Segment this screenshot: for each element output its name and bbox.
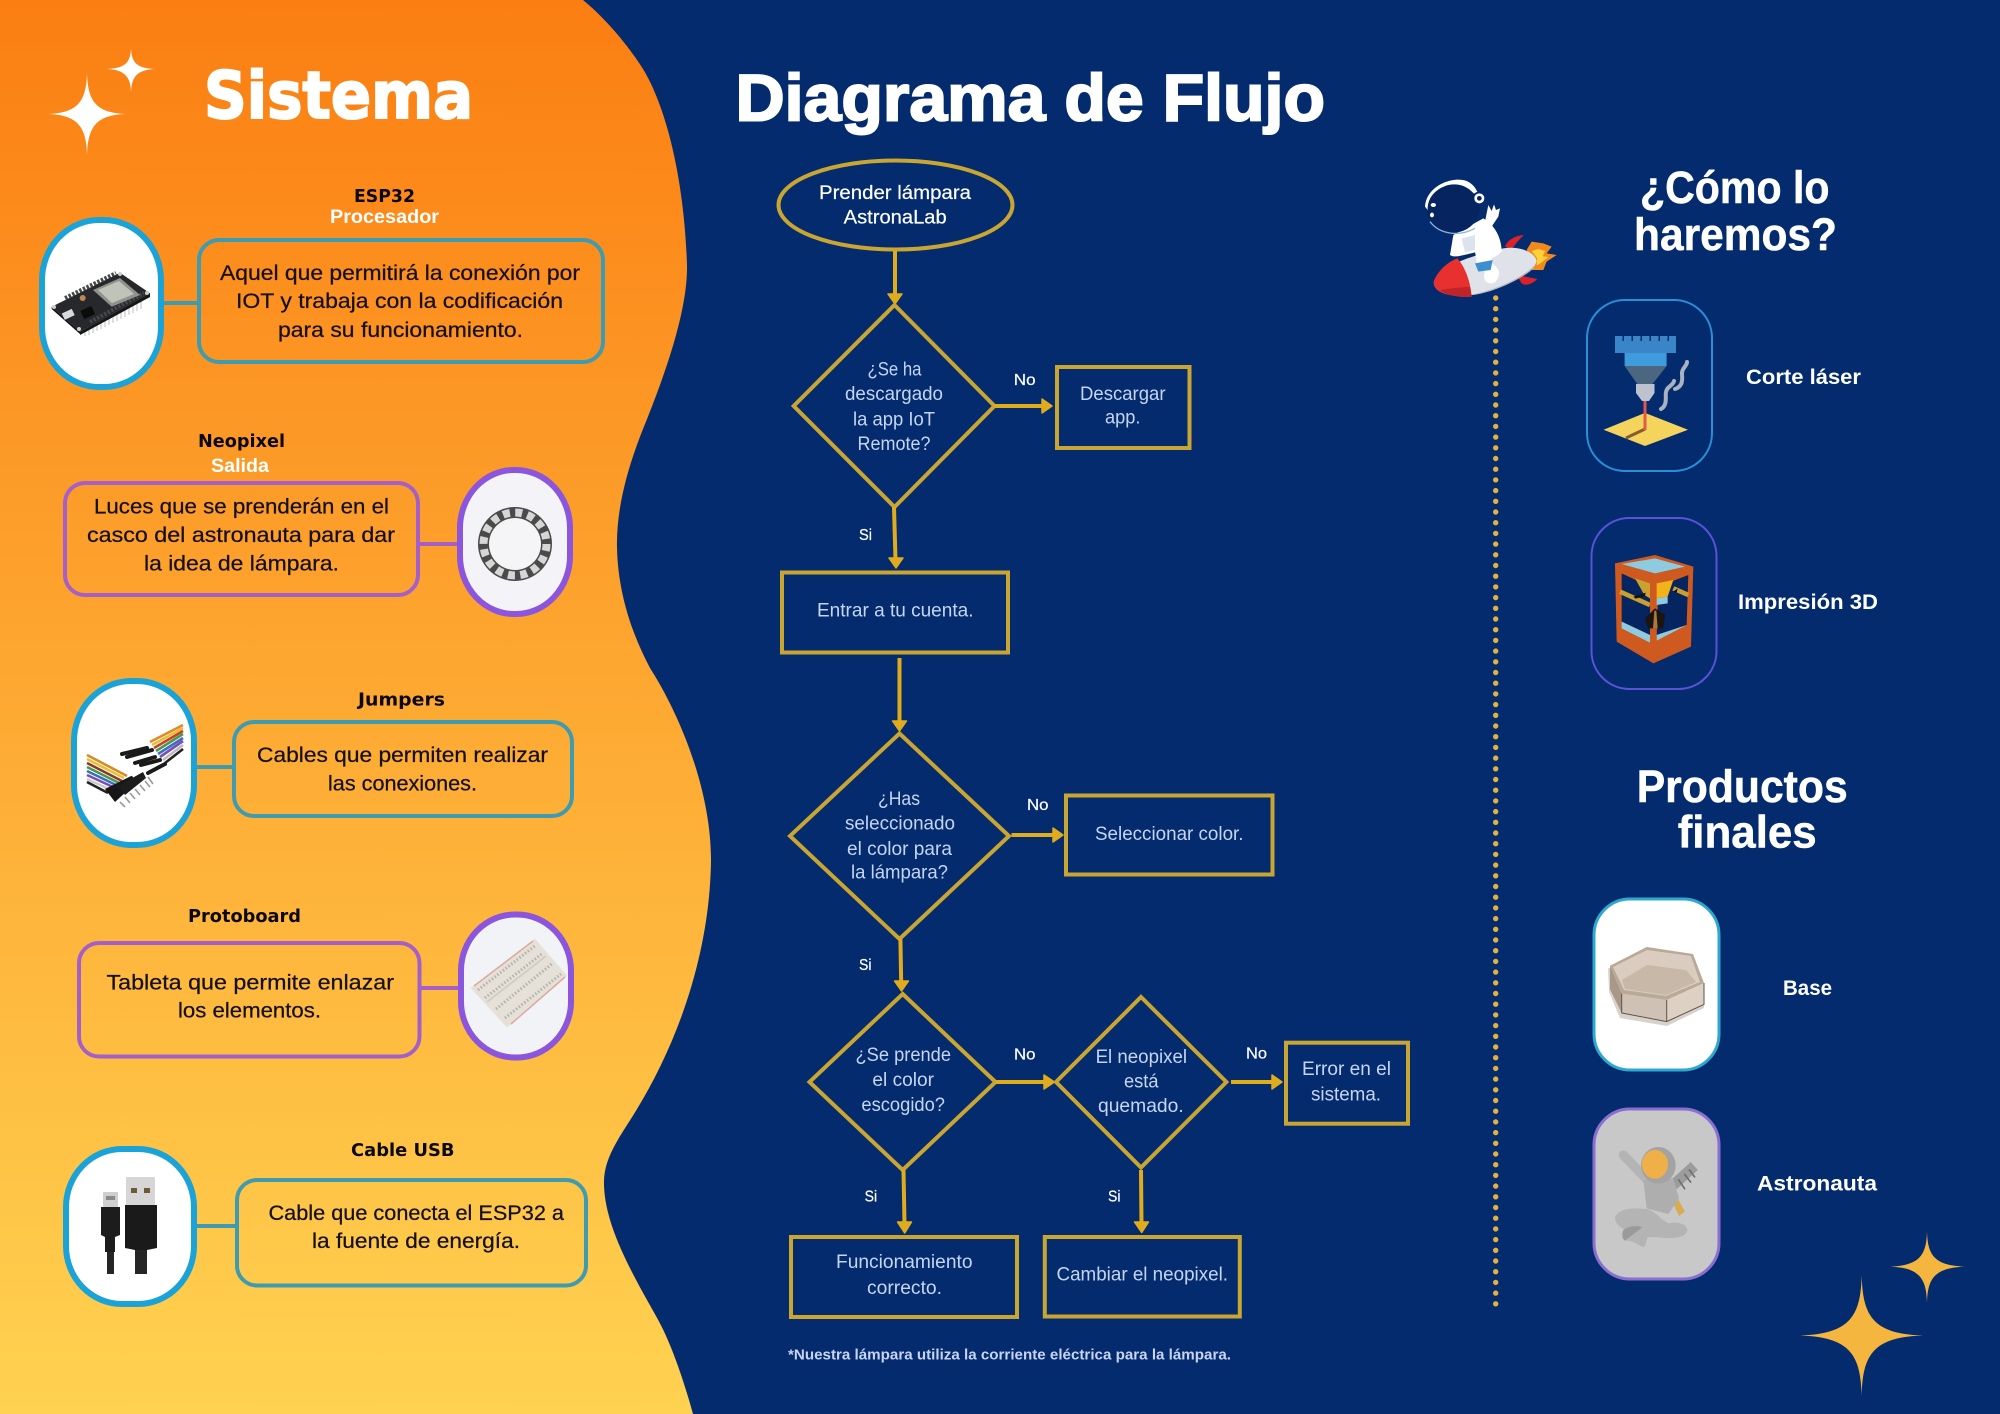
label: No: No [1027,797,1049,814]
heading: Productos finales [1637,761,1848,858]
arrow: to Error [1231,1075,1282,1089]
box: Cambiar el neopixel [1045,1237,1240,1316]
label: Base: Base [1783,976,1832,1000]
astronaut body [1450,218,1502,258]
heading: Como lo haremos: haremos? [1634,209,1837,260]
text: Jumpers description: las conexiones. [328,772,477,796]
text: Protoboard description: los elementos. [178,1000,321,1022]
box: Descargar app [1057,367,1190,448]
start node: AstronaLab [844,208,947,229]
box: Cambiar el neopixel: Cambiar el neopixel. [1056,1264,1228,1286]
box: Error en el sistema [1286,1043,1408,1124]
helmet [1427,181,1480,233]
start node [778,160,1012,250]
box: Entrar a tu cuenta: Entrar a tu cuenta. [817,600,974,622]
text: ESP32 description [220,262,580,342]
item: Protoboard [79,906,571,1058]
icon: hexagonal tray [1608,947,1704,1026]
text: Cable USB description: la fuente de energía. [312,1230,520,1253]
text: Jumpers description [257,744,548,796]
label: Cable USB: Cable USB [351,1140,454,1161]
box: Seleccionar color: Seleccionar color. [1095,823,1244,845]
label: Salida: Salida [211,456,269,477]
decision: color seleccionado [790,734,1009,939]
decision: color prendido: el color [872,1069,934,1091]
icon: laser cutter [1604,339,1688,446]
item: Jumpers [74,681,572,845]
description box: Jumpers [234,722,572,816]
decision: color seleccionado: el color para [847,838,952,860]
item: Neopixel [65,431,570,614]
decision: color seleccionado: ¿Has [878,788,920,810]
label: No: No [1014,1046,1036,1064]
rocket nose [1434,258,1472,297]
panel: productos finales [1594,761,1878,1279]
box: Descargar app: app. [1105,407,1140,429]
arrow: to Funcionamiento [898,1170,912,1233]
panel: como lo haremos [1587,162,1878,689]
orange wave panel shape [0,0,711,1414]
text: Neopixel description [87,496,395,576]
label: Si: Si [865,1188,877,1205]
decision: color prendido: escogido? [861,1094,945,1116]
connector [164,301,198,305]
text: Neopixel description: la idea de lámpara. [144,552,339,576]
decision: color prendido: ¿Se prende [856,1044,951,1066]
decision: app descargada: ¿Se ha [868,358,922,380]
label: Jumpers: Jumpers [356,690,445,710]
description box: Neopixel [65,483,418,595]
decision: neopixel quemado: El neopixel [1096,1046,1187,1068]
card: corte laser [1587,300,1712,471]
label: Si: Si [859,957,872,974]
label: Si: Si [1108,1188,1120,1205]
icon: 3D printer [1615,555,1693,663]
label: Si: Si [859,527,872,544]
start node: Prender lámpara [819,183,971,204]
icon: ESP32 board [52,272,150,336]
decision: app descargada [794,305,994,507]
text: ESP32 description: IOT y trabaja con la codificación [236,290,563,313]
label: Procesador: Procesador [330,207,440,228]
connector [196,1224,236,1228]
arrow: to decision 3 [894,939,908,991]
label: Corte laser: Corte láser [1746,365,1862,389]
text: Protoboard description [106,972,394,1022]
text: Neopixel description: Luces que se prenderán en el [94,496,389,518]
dotted divider [1493,298,1498,1312]
arrow: to Seleccionar [1012,828,1063,842]
icon: Neopixel ring [478,507,552,581]
text: Protoboard description: Tableta que permite enlazar [106,972,394,994]
text: Jumpers description: Cables que permiten realizar [257,744,548,767]
pill image frame: Neopixel [460,470,570,614]
pill image frame: Jumpers [74,681,194,845]
decision: color seleccionado: seleccionado [845,813,955,835]
box: Error en el sistema: sistema. [1311,1084,1381,1106]
rocket fins back [1505,235,1537,285]
connector [196,765,233,769]
connector [420,542,458,546]
decision: neopixel quemado: está [1124,1071,1159,1093]
card: astronauta [1594,1109,1719,1279]
label: Neopixel: Neopixel [198,431,285,452]
arrow: to decision 4 [996,1075,1054,1089]
heading: Como lo haremos: ¿Cómo lo [1640,162,1830,213]
text: Cable USB description [268,1202,564,1253]
icon: jumper wires [87,725,183,807]
icon: astronaut on rocket [1425,180,1557,297]
heading: Diagrama de Flujo: Diagrama de Flujo [736,60,1325,134]
text: Cable USB description: Cable que conecta el ESP32 a [268,1202,564,1225]
decision: app descargada: descargado [845,383,943,405]
arrow: to Descargar [994,399,1052,413]
footnote: *Nuestra lámpara utiliza la corriente eléctrica para la lámpara. [788,1348,1231,1364]
box: Entrar a tu cuenta [782,572,1008,652]
item: Cable USB [66,1140,586,1304]
card: impresion 3D [1592,518,1716,689]
heading: Productos finales: finales [1678,806,1817,858]
box: Error en el sistema: Error en el [1302,1058,1391,1080]
label: No: No [1014,372,1036,389]
icon: USB cables [101,1177,157,1274]
heading: Productos finales: Productos [1637,761,1848,812]
arrow: start to decision 1 [888,251,902,304]
label: No: No [1246,1046,1267,1063]
decision: app descargada: Remote? [858,433,931,455]
description box: ESP32 [199,240,603,362]
arrow: to Cambiar [1134,1170,1148,1232]
icon: golden sparkle stars [1800,1231,1965,1396]
connector [421,986,459,990]
icon: white sparkle stars [48,48,156,155]
box: Funcionamiento correcto [791,1237,1017,1317]
description box: Protoboard [79,943,420,1056]
icon: astronaut figure [1615,1147,1695,1247]
description box: Cable USB [237,1180,586,1286]
card: base [1594,899,1719,1070]
label: Impresion 3D: Impresión 3D [1738,590,1878,614]
label: Astronauta: Astronauta [1757,1172,1878,1196]
rocket body [1434,248,1537,296]
text: ESP32 description: para su funcionamiento. [278,319,523,342]
text: Neopixel description: casco del astronauta para dar [87,524,395,547]
pill image frame: ESP32 [42,220,161,387]
pill image frame: Cable USB [66,1149,194,1304]
flame [1527,242,1557,270]
heading: Como lo haremos [1634,162,1837,260]
box: Seleccionar color [1066,796,1272,874]
decision: color seleccionado: la lámpara? [851,862,948,884]
heading: Sistema: Sistema [204,59,473,134]
arrow: to Entrar [889,507,903,568]
box: Funcionamiento correcto: Funcionamiento [836,1251,973,1273]
decision: color prendido [810,994,996,1170]
item: ESP32 [42,186,603,387]
decision: app descargada: la app IoT [853,409,935,431]
arrow: to decision 2 [892,658,906,731]
text: ESP32 description: Aquel que permitirá la conexión por [220,262,580,285]
label: ESP32: ESP32 [354,186,415,207]
panel: diagrama de flujo [736,60,1408,1364]
pill image frame: Protoboard [461,914,571,1058]
decision: neopixel quemado [1056,997,1226,1168]
box: Funcionamiento correcto: correcto. [867,1277,942,1299]
panel: sistema [0,0,711,1414]
box: Descargar app: Descargar [1080,383,1166,405]
label: Protoboard: Protoboard [188,906,301,927]
decision: neopixel quemado: quemado. [1098,1095,1184,1117]
icon: protoboard [471,939,567,1028]
